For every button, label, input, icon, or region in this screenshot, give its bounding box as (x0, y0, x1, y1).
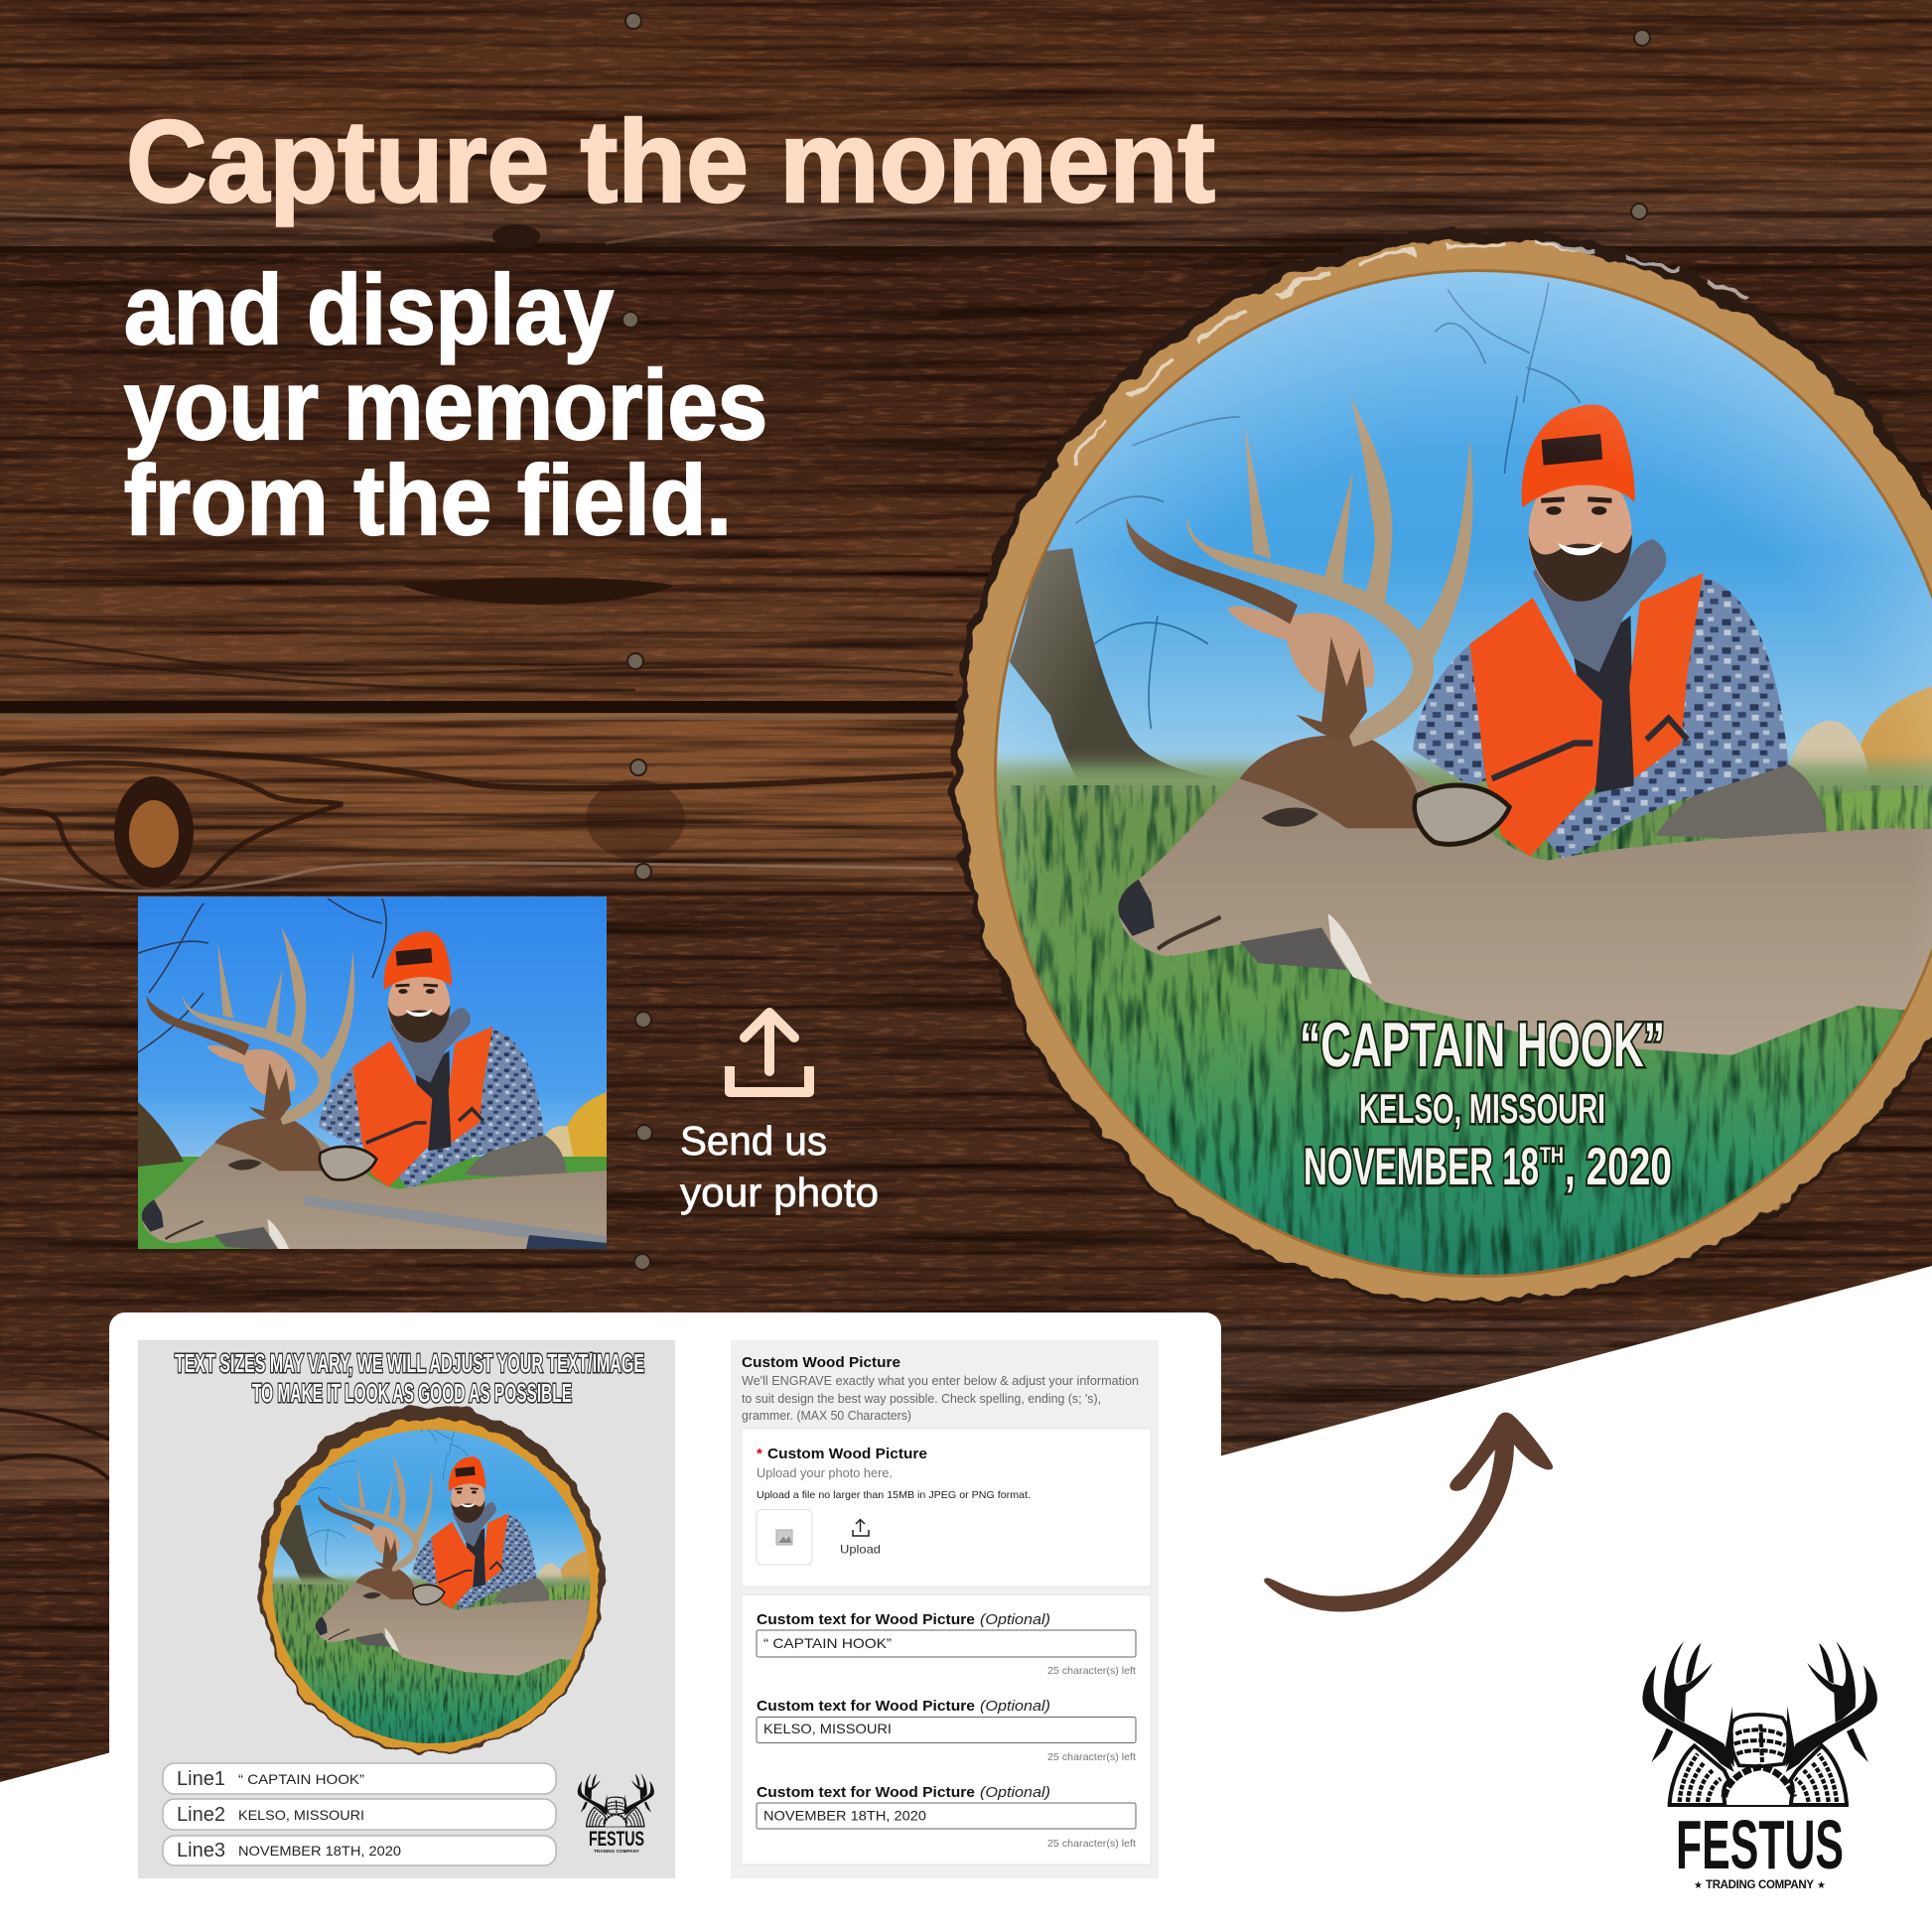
line 2 field (163, 1799, 556, 1830)
festus trading company logo: ★ (1694, 1880, 1703, 1891)
line 3 field: NOVEMBER 18TH, 2020 (238, 1843, 401, 1859)
upload icon: peach (730, 1013, 809, 1092)
card: order form (731, 1340, 1159, 1878)
field 3: NOVEMBER 18TH, 2020 (763, 1807, 926, 1823)
form heading: Custom Wood Picture (742, 1354, 900, 1371)
small festus logo: FESTUS (589, 1828, 644, 1851)
field 2: 25 character(s) left (1047, 1751, 1136, 1763)
rifle barrel (304, 1195, 607, 1249)
upload icon: small (853, 1519, 869, 1536)
field 1: Custom text for Wood Picture (757, 1611, 975, 1628)
headline: and display your memories from the field (124, 254, 767, 555)
upload box: Custom Wood Picture (767, 1446, 927, 1462)
festus trading company logo: TRADING COMPANY (1706, 1879, 1814, 1891)
headline: capture the moment: Capture the moment (126, 96, 1215, 226)
field 1: (Optional) (980, 1611, 1050, 1628)
headline: and display your memories from the field: from the field. (124, 445, 732, 555)
headline: and display your memories from the field: and display (124, 254, 614, 364)
notice text: TEXT SIZES MAY VARY, WE WILL ADJUST YOUR TEXT/IMAGE (175, 1348, 644, 1378)
field 2 (757, 1698, 1136, 1763)
engraved text: captain hook (1300, 1011, 1672, 1196)
field 2: (Optional) (980, 1698, 1050, 1715)
field 1: 25 character(s) left (1047, 1665, 1136, 1677)
white panel: personalize steps (109, 1312, 1221, 1932)
field 2: KELSO, MISSOURI (763, 1721, 892, 1736)
sapwood rim (960, 241, 1932, 1300)
form heading: grammer. (MAX 50 Characters) (742, 1409, 911, 1423)
send us your photo label (680, 1118, 879, 1215)
wood slice print: large (930, 218, 1932, 1304)
white diagonal lower area (0, 1266, 1932, 1932)
line 2 field: Line2 (177, 1804, 225, 1826)
upload box: Upload your photo here. (757, 1466, 893, 1480)
field 3: (Optional) (980, 1784, 1050, 1801)
image placeholder (757, 1509, 812, 1565)
upload box: Upload (840, 1543, 881, 1557)
festus trading company logo: ★ (1817, 1880, 1826, 1891)
field 3 (757, 1784, 1136, 1850)
wood screws (622, 13, 1650, 1270)
engraved text: captain hook: NOVEMBER 18 (1304, 1138, 1539, 1196)
line 3 field (163, 1836, 556, 1865)
customer photo (138, 897, 607, 1249)
notice text (175, 1348, 644, 1408)
upload box (742, 1429, 1151, 1587)
festus trading company logo (1642, 1641, 1877, 1891)
engraved text: captain hook: TH (1540, 1143, 1564, 1168)
form heading: We'll ENGRAVE exactly what you enter below & adjust your information (742, 1374, 1139, 1388)
send us your photo label: Send us (680, 1118, 827, 1164)
wood slice print: small (253, 1394, 636, 1754)
headline: and display your memories from the field: your memories (124, 349, 767, 460)
field 3: Custom text for Wood Picture (757, 1784, 975, 1801)
field 2: Custom text for Wood Picture (757, 1698, 975, 1715)
send us your photo label: your photo (680, 1170, 879, 1215)
wood knot (0, 749, 953, 893)
engraved text: captain hook: KELSO, MISSOURI (1359, 1085, 1605, 1132)
field 1 (757, 1611, 1136, 1677)
engraved text: captain hook: “CAPTAIN HOOK” (1300, 1011, 1665, 1080)
small festus logo: TRADING COMPANY (594, 1849, 639, 1854)
small festus logo (578, 1773, 654, 1854)
line 1 field: “ CAPTAIN HOOK” (238, 1771, 364, 1787)
card: preview sample (138, 1340, 675, 1878)
notice text: TO MAKE IT LOOK AS GOOD AS POSSIBLE (252, 1378, 572, 1408)
line 1 field (163, 1763, 556, 1794)
photo scene (997, 272, 1932, 1275)
upload box: Upload a file no larger than 15MB in JPEG or PNG format. (757, 1489, 1031, 1501)
upload box: * (757, 1446, 762, 1462)
field 1: “ CAPTAIN HOOK” (763, 1635, 892, 1651)
line 2 field: KELSO, MISSOURI (238, 1807, 364, 1823)
form heading: to suit design the best way possible. Check spelling, ending (s; 's), (742, 1392, 1101, 1406)
field 3: 25 character(s) left (1047, 1838, 1136, 1850)
engraved text: captain hook: , 2020 (1565, 1138, 1672, 1196)
form heading (742, 1354, 1139, 1423)
arrow: brown curved (1264, 1413, 1553, 1612)
text fields box (742, 1594, 1151, 1864)
line 1 field: Line1 (177, 1768, 225, 1790)
bark edge (953, 229, 1932, 1304)
line 3 field: Line3 (177, 1840, 225, 1862)
